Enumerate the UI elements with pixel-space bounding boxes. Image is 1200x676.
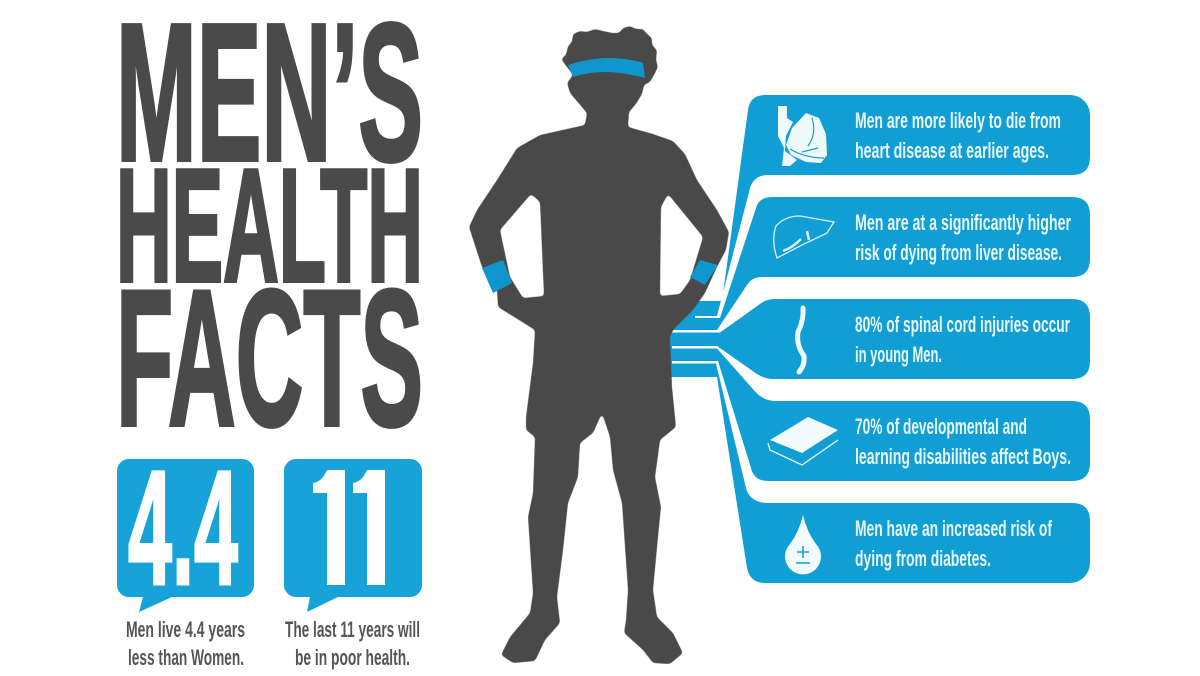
text: book: [855, 414, 1071, 469]
gap 1: [695, 157, 1095, 318]
icon: spine: [798, 308, 804, 372]
text: heart: Men are more likely to die from: [855, 108, 1061, 133]
caption: 11: be in poor health.: [295, 645, 410, 670]
caption: 4.4: [126, 617, 245, 670]
speech bubble: 4.4: [117, 459, 254, 612]
text: diabetes: Men have an increased risk of: [855, 516, 1052, 541]
text: FACTS: [116, 250, 423, 467]
fact 3: spine: [798, 308, 1070, 372]
stat: 4.4 years: 4.4: [128, 436, 238, 619]
caption: 4.4: less than Women.: [128, 645, 244, 670]
caption: 11: [285, 617, 420, 670]
silhouette of a man: [469, 26, 729, 664]
fact 2: liver: [774, 210, 1071, 265]
text: liver: Men are at a significantly higher: [855, 210, 1071, 235]
text: heart: [855, 108, 1061, 163]
left wristband: [482, 260, 512, 293]
speech bubble: 11: [284, 459, 422, 612]
gap 2: [672, 259, 1095, 332]
blue connector shape: [655, 95, 1090, 583]
icon: heart: [778, 106, 827, 166]
stat: 11 years: [284, 459, 422, 670]
headband: [568, 58, 645, 78]
fact 5: diabetes: [785, 515, 1052, 574]
stat: 4.4 years: [117, 436, 254, 670]
panel group: connected facts: [655, 95, 1095, 583]
gap 4: [672, 361, 1095, 521]
caption: 4.4: Men live 4.4 years: [126, 617, 245, 642]
body: [469, 26, 729, 664]
right wristband: [690, 260, 718, 285]
icon: blood drop: [785, 515, 821, 574]
text: spine: [855, 312, 1070, 367]
text: book: learning disabilities affect Boys.: [855, 444, 1071, 469]
text: liver: risk of dying from liver disease.: [855, 240, 1062, 265]
number: 11: 11: [297, 435, 396, 621]
text: diabetes: [855, 516, 1052, 571]
text: diabetes: dying from diabetes.: [855, 546, 991, 571]
text: spine: 80% of spinal cord injuries occur: [855, 312, 1070, 337]
text: spine: in young Men.: [855, 342, 942, 367]
gap 3: [672, 346, 1095, 419]
text: liver: [855, 210, 1071, 265]
title: [116, 0, 423, 467]
caption: 11: The last 11 years will: [285, 617, 420, 642]
text: heart: heart disease at earlier ages.: [855, 138, 1049, 163]
text: HEALTH: [116, 136, 423, 316]
icon: book: [768, 417, 838, 465]
fact 4: book: [768, 414, 1071, 469]
icon: liver: [774, 216, 834, 258]
number: 11: [313, 470, 385, 585]
text: book: 70% of developmental and: [855, 414, 1027, 439]
fact 1: heart: [778, 106, 1061, 166]
